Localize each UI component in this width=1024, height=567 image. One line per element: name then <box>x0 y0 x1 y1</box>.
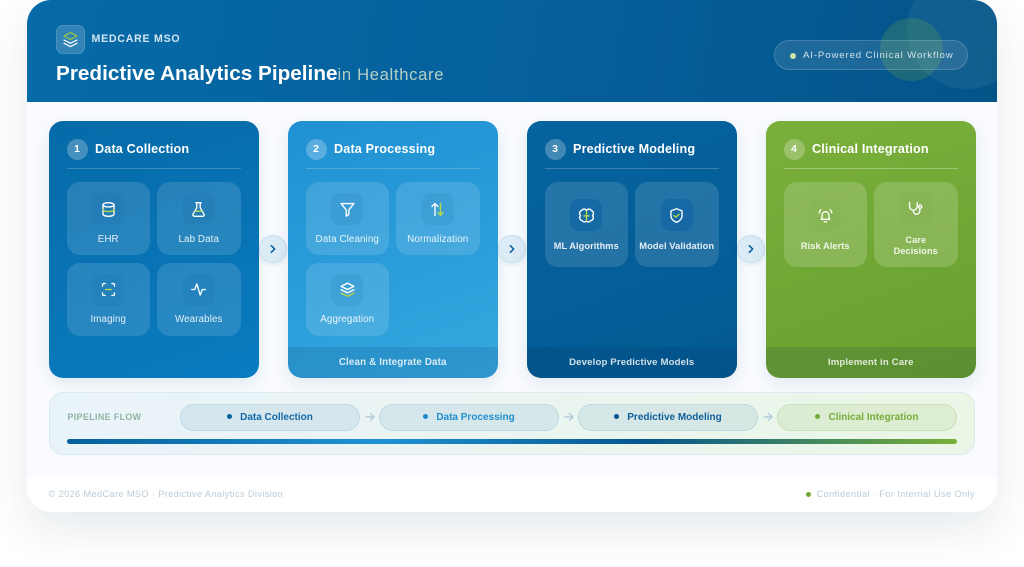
icon: bell <box>809 199 841 231</box>
step number <box>66 138 88 160</box>
step number <box>784 138 804 160</box>
label: Lab Data <box>178 234 219 244</box>
label: Risk Alerts <box>801 241 850 251</box>
step number <box>544 138 566 160</box>
tile: EHR <box>66 182 150 255</box>
panel footer: Clean & Integrate Data <box>339 357 447 368</box>
progress bar <box>67 439 957 444</box>
step number: 4 <box>791 142 797 154</box>
flow label: PIPELINE FLOW <box>68 412 141 422</box>
pill: data collection <box>180 404 360 431</box>
badge text: AI-Powered Clinical Workflow <box>803 50 954 61</box>
tile: model validation <box>635 182 718 267</box>
arrow: step 3 to 4 <box>737 235 765 263</box>
pill: clinical integration: Clinical Integration <box>828 412 918 423</box>
tile: aggregation <box>306 262 389 336</box>
panel footer <box>288 347 498 378</box>
label: Decisions <box>894 246 938 256</box>
label: Care <box>905 234 926 244</box>
pill: data collection: Data Collection <box>240 412 313 423</box>
panel: clinical integration <box>766 121 976 378</box>
decorative circle green <box>880 18 943 81</box>
icon: database <box>92 193 124 225</box>
step number <box>306 138 326 160</box>
tile: lab data <box>157 182 240 255</box>
confidential dot <box>806 492 810 497</box>
label: Imaging <box>90 314 126 325</box>
arrow <box>366 413 374 421</box>
label: Data Cleaning <box>316 234 379 244</box>
pill: predictive modeling: Predictive Modeling <box>627 412 722 423</box>
badge <box>774 40 968 70</box>
pill: data processing <box>379 404 559 431</box>
label: Aggregation <box>320 314 374 325</box>
icon: pulse <box>183 274 215 306</box>
arrow <box>564 413 574 421</box>
panel heading: Data Processing <box>334 142 435 156</box>
icon: filter <box>331 193 363 225</box>
tile: wearables <box>157 262 240 336</box>
label: Model Validation <box>639 240 714 250</box>
step number: 2 <box>313 142 319 154</box>
step number: 1 <box>74 142 80 154</box>
confidential text: Confidential · For Internal Use Only <box>817 489 975 499</box>
icon: layers <box>331 274 363 306</box>
panel footer <box>766 347 976 378</box>
brand name: MEDCARE MSO <box>92 33 180 45</box>
header band <box>27 0 997 102</box>
panel: predictive modeling <box>526 121 737 378</box>
icon: brain <box>570 199 602 231</box>
icon: up down arrows <box>422 193 454 225</box>
icon: flask <box>183 193 215 225</box>
tile: normalization <box>396 182 480 255</box>
tile: risk alerts <box>784 182 867 267</box>
panel footer: Develop Predictive Models <box>569 357 694 368</box>
pill: clinical integration <box>777 404 957 431</box>
tile: data cleaning <box>306 182 389 255</box>
decorative circle large <box>907 0 1024 89</box>
label: Normalization <box>407 234 468 244</box>
panel heading: Predictive Modeling <box>573 142 695 156</box>
panel: data collection <box>48 121 259 378</box>
icon: stethoscope <box>900 192 932 224</box>
arrow: step 2 to 3 <box>498 235 526 263</box>
badge dot <box>790 53 796 59</box>
step number: 3 <box>552 142 558 154</box>
icon: shield <box>661 199 693 231</box>
copyright: © 2026 MedCare MSO · Predictive Analytics Division <box>48 489 283 499</box>
panel footer: Implement in Care <box>828 357 914 368</box>
tile: care decisions <box>874 182 958 267</box>
arrow: step 1 to 2 <box>259 235 287 263</box>
tile: ml algorithms <box>544 182 628 267</box>
label: ML Algorithms <box>554 240 619 250</box>
tile: imaging <box>66 262 150 336</box>
logo icon <box>56 25 84 54</box>
footer strip <box>27 477 997 512</box>
icon: scan <box>92 274 124 306</box>
pipeline flow panel <box>49 392 975 455</box>
panel heading: Data Collection <box>95 142 189 156</box>
panel heading: Clinical Integration <box>812 142 929 156</box>
panel footer <box>526 347 737 378</box>
pill: data processing: Data Processing <box>436 412 515 423</box>
panel: data processing <box>288 121 498 378</box>
title: Predictive Analytics Pipelinein Healthcare <box>56 62 444 85</box>
pill: predictive modeling <box>578 404 758 431</box>
label: Wearables <box>175 314 223 325</box>
label <box>894 234 938 256</box>
arrow <box>764 413 772 421</box>
label: EHR <box>98 234 119 244</box>
